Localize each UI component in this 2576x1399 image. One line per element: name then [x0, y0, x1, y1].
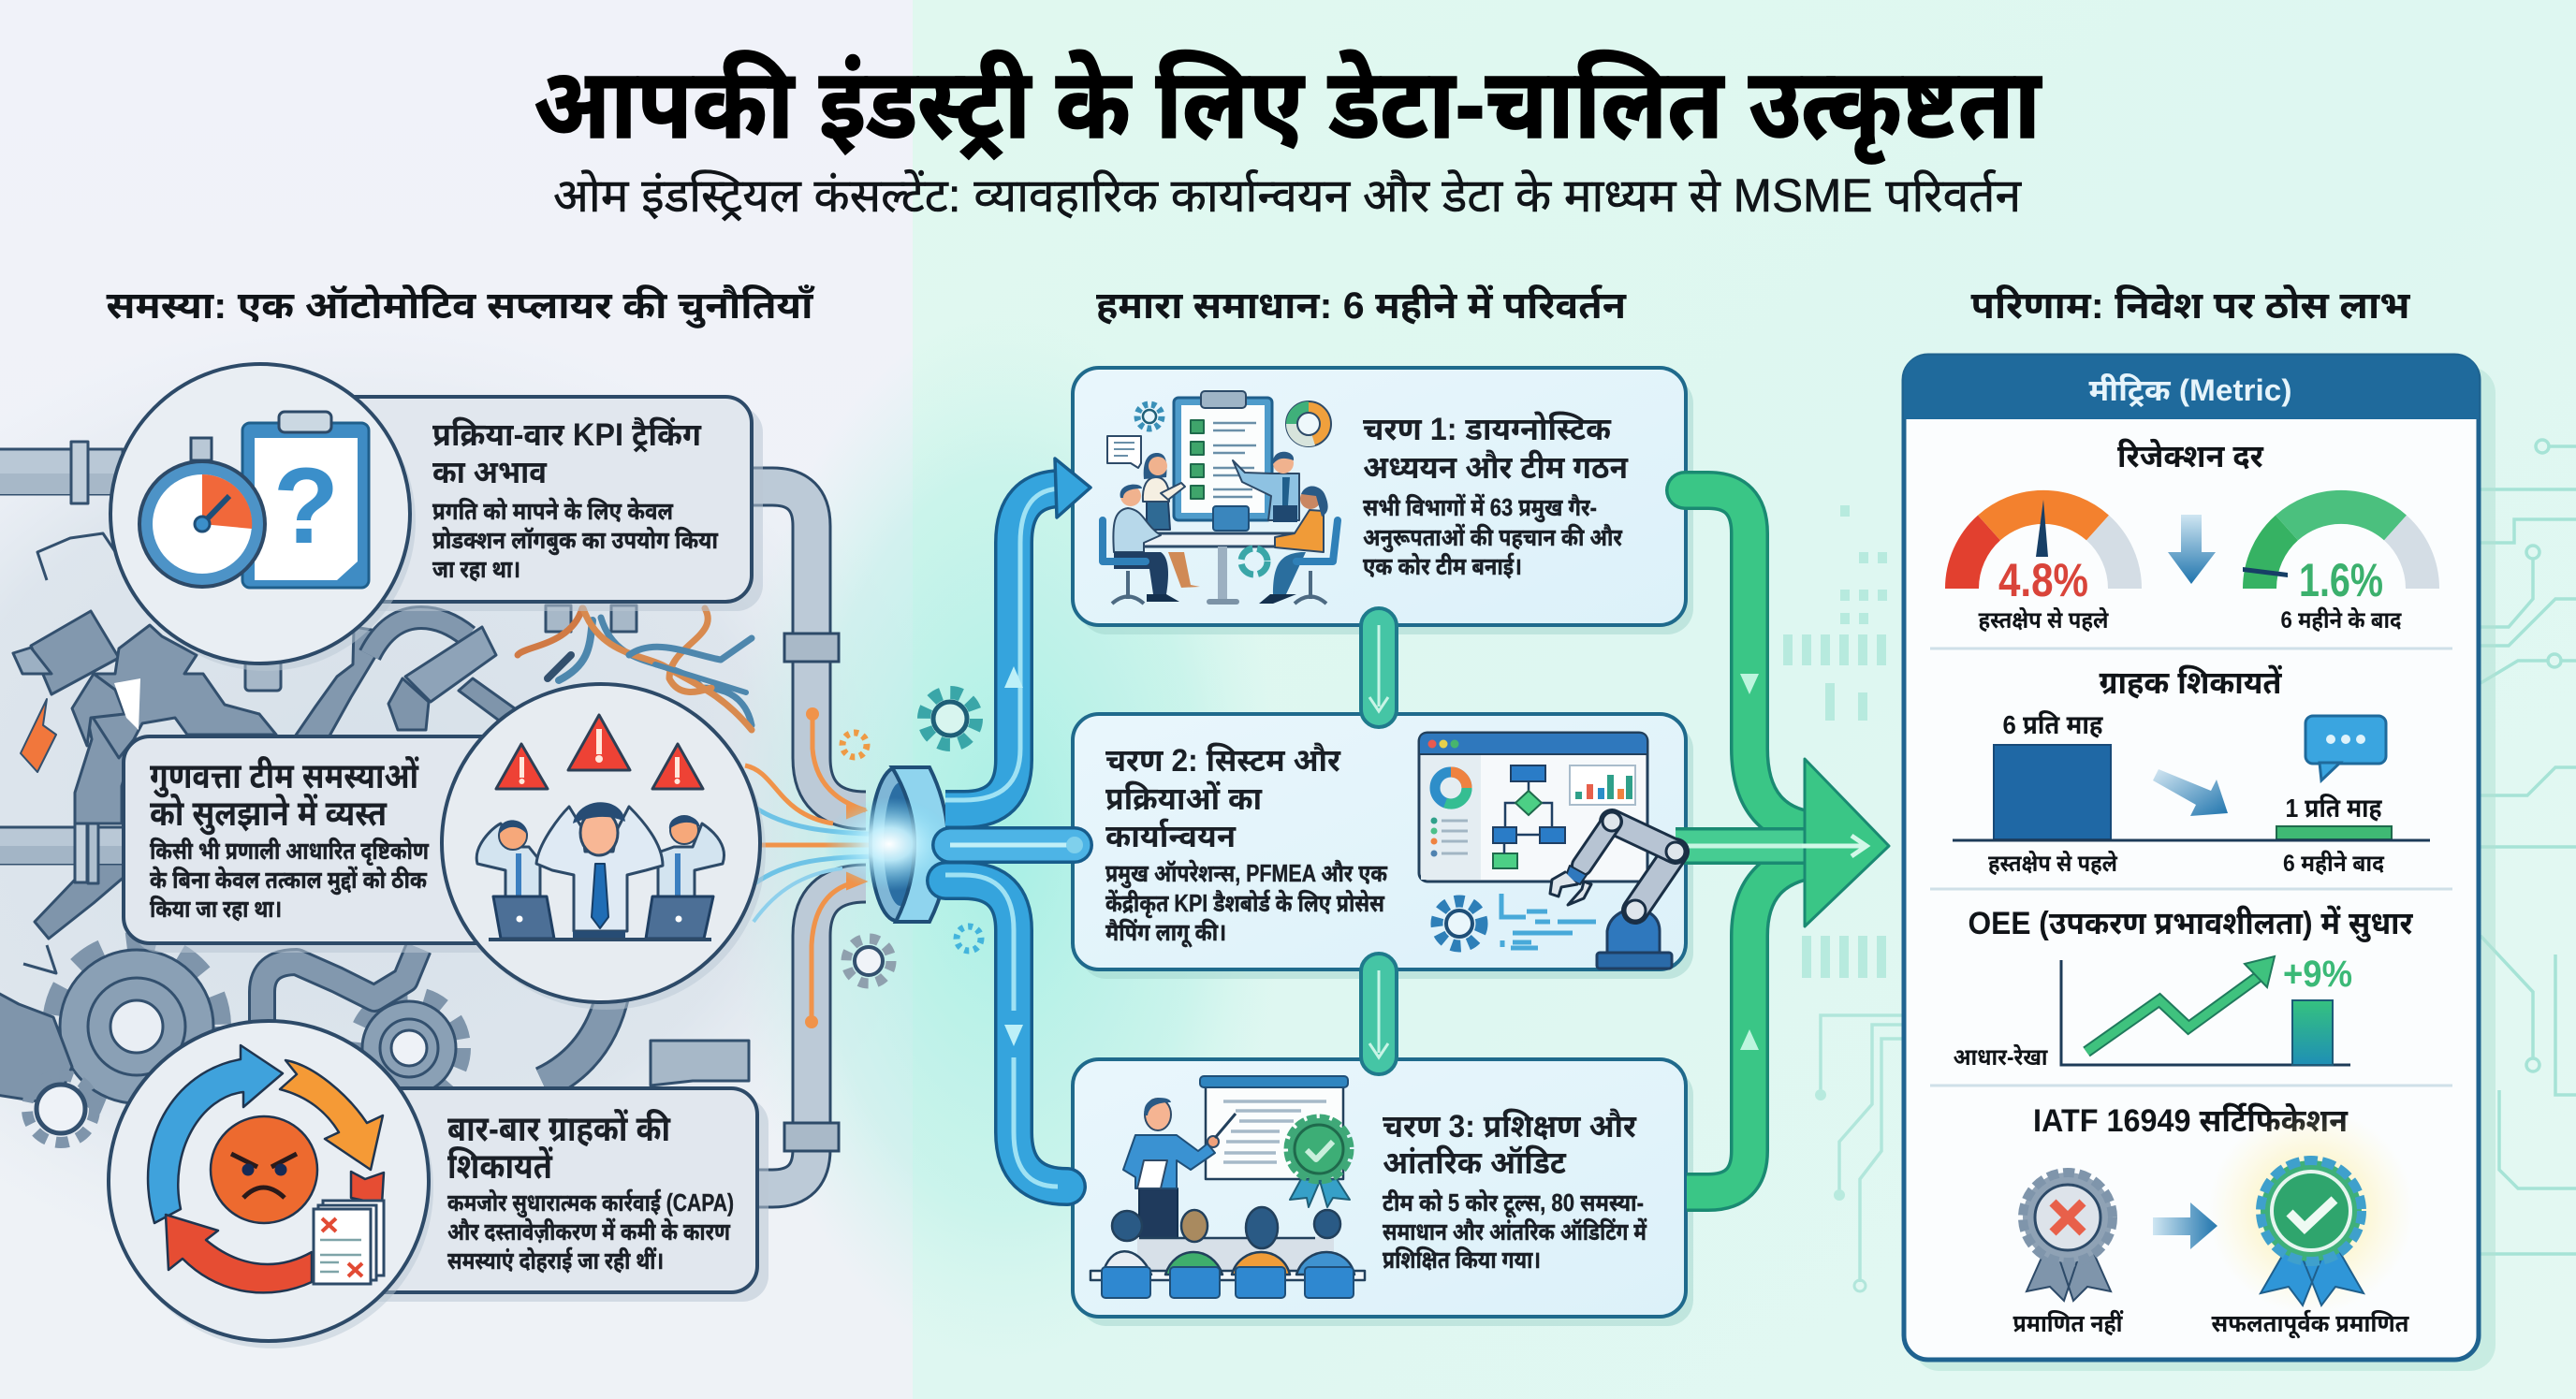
circle: stopwatch and clipboard — [110, 364, 416, 671]
circle: complaint cycle — [109, 1021, 433, 1348]
card 1 body: प्रगति को मापने के लिए केवल — [432, 497, 674, 525]
orange flow on pipes — [812, 716, 866, 1020]
icon: warning triangles — [496, 715, 703, 789]
cracks — [23, 533, 122, 973]
panel: step 2 — [1073, 714, 1693, 979]
arrow down right — [2153, 769, 2228, 816]
icon: clipboard question — [242, 412, 369, 588]
pipe stub top left — [0, 442, 123, 503]
card 3 body: और दस्तावेज़ीकरण में कमी के कारण — [447, 1217, 731, 1246]
heading: solution: हमारा समाधान: 6 महीने में परिवर्तन — [1096, 284, 1627, 327]
subtitle: ओम इंडस्ट्रियल कंसल्टेंट: व्यावहारिक कार्यान्वयन और डेटा के माध्यम से MSME परिवर्तन — [553, 169, 2022, 222]
metrics header: मीट्रिक (Metric) — [2089, 373, 2291, 408]
step 2 illustration: dashboard — [1419, 733, 1647, 948]
card 2 heading: गुणवत्ता टीम समस्याओं — [150, 755, 419, 798]
bar chart: complaints: 1 प्रति माह — [2286, 793, 2383, 823]
card 2 body: किसी भी प्रणाली आधारित दृष्टिकोण — [150, 837, 430, 866]
badge: certified — [2208, 1108, 2414, 1339]
step 1 illustration: team meeting — [1103, 391, 1338, 605]
step 1 body: सभी विभागों में 63 प्रमुख गैर- — [1363, 493, 1597, 522]
panel: step 1 — [1073, 368, 1693, 634]
arrow right — [2153, 1202, 2217, 1249]
bar chart: complaints: हस्तक्षेप से पहले — [1988, 850, 2117, 877]
card 1 heading — [432, 416, 702, 490]
data pixels and circuit left of results panel — [1783, 505, 1904, 1291]
step 3 body: टीम को 5 कोर टूल्स, 80 समस्या- — [1383, 1188, 1644, 1218]
step 3 body — [1383, 1188, 1647, 1274]
arrowhead light line — [1802, 836, 1866, 856]
line chart: OEE — [1953, 954, 2352, 1071]
bent pipe lower — [262, 948, 418, 1025]
bar chart: complaints — [1953, 709, 2430, 877]
line chart: OEE: +9% — [2283, 954, 2352, 995]
step 3 body: समाधान और आंतरिक ऑडिटिंग में — [1383, 1217, 1647, 1246]
pipe system into hub — [739, 487, 889, 1188]
card 3 heading — [447, 1108, 671, 1187]
icon: clipboard question: ? — [273, 446, 339, 566]
card 3 heading: शिकायतें — [447, 1145, 553, 1187]
cycle arrows — [148, 1045, 384, 1292]
card 3 body: कमजोर सुधारात्मक कार्रवाई (CAPA) — [447, 1188, 734, 1217]
angry face — [211, 1116, 317, 1223]
step 1 heading: चरण 1: डायग्नोस्टिक — [1363, 412, 1612, 447]
connector step 2 to 3 — [1361, 954, 1397, 1074]
gauge before — [1962, 500, 2125, 634]
step 1 body — [1363, 493, 1622, 580]
flow lines into hub — [745, 765, 889, 922]
icon: stopwatch — [139, 438, 265, 587]
step 3 illustration: training — [1090, 1076, 1365, 1298]
pipe stub middle left — [0, 810, 127, 939]
people with heads in hands — [476, 802, 724, 940]
rejection rate heading: रिजेक्शन दर — [2117, 438, 2264, 474]
badge: certified: सफलतापूर्वक प्रमाणित — [2211, 1309, 2409, 1339]
small gears around hub — [842, 692, 981, 984]
step 1 heading — [1363, 412, 1629, 486]
step 1 body: एक कोर टीम बनाई। — [1363, 552, 1522, 580]
panel: step 3 — [1073, 1059, 1693, 1326]
panel: problem card 3 — [281, 1088, 768, 1302]
large gear — [52, 942, 221, 1111]
card 1 body — [432, 497, 719, 583]
broken connector — [651, 1041, 749, 1086]
flame — [21, 699, 56, 772]
step 3 body: प्रशिक्षित किया गया। — [1383, 1246, 1541, 1274]
step 3 heading: चरण 3: प्रशिक्षण और — [1383, 1109, 1637, 1144]
circuit decoration right — [2481, 440, 2576, 1254]
broken machinery background — [0, 442, 752, 1143]
badge: not certified — [2012, 1173, 2124, 1337]
gauge before: हस्तक्षेप से पहले — [1979, 606, 2109, 634]
gauge after: 1.6% — [2299, 554, 2383, 606]
step 1 body: अनुरूपताओं की पहचान की और — [1363, 523, 1622, 552]
pipe clamps — [784, 634, 839, 1151]
step 2 heading — [1105, 743, 1341, 854]
step 3 heading — [1383, 1109, 1637, 1181]
green arrowhead — [1805, 759, 1889, 926]
blue arrowhead to step 1 — [1055, 459, 1090, 517]
card 3 body: समस्याएं दोहराई जा रही थीं। — [447, 1246, 664, 1275]
card 1 body: प्रोडक्शन लॉगबुक का उपयोग किया — [432, 526, 719, 555]
bent pipe upper — [370, 618, 468, 655]
card 2 body: के बिना केवल तत्काल मुद्दों को ठीक — [150, 866, 427, 895]
step 2 heading: चरण 2: सिस्टम और — [1105, 743, 1341, 779]
blue solution arrows — [945, 488, 1083, 1187]
panel: metrics — [1904, 356, 2496, 1371]
step 2 body: प्रमुख ऑपरेशन्स, PFMEA और एक — [1105, 859, 1387, 888]
step 1 heading: अध्ययन और टीम गठन — [1363, 450, 1629, 486]
line chart: OEE: आधार-रेखा — [1953, 1043, 2048, 1071]
flow chevrons on green pipes — [1740, 674, 1759, 1050]
gauge after: 6 महीने के बाद — [2280, 606, 2402, 634]
small gear bottom left — [27, 1075, 95, 1143]
rubble far left — [0, 992, 72, 1104]
card 2 body: किया जा रहा था। — [150, 895, 282, 923]
heading: results: परिणाम: निवेश पर ठोस लाभ — [1971, 284, 2410, 327]
green result arrows — [1676, 490, 1863, 1192]
card 2 heading: को सुलझाने में व्यस्त — [150, 793, 388, 836]
card 2 heading — [150, 755, 419, 836]
card 3 heading: बार-बार ग्राहकों की — [447, 1108, 671, 1149]
step 2 heading: प्रक्रियाओं का — [1105, 780, 1263, 817]
vertical broken pipe — [75, 716, 136, 823]
medium gear — [357, 996, 461, 1100]
card 1 heading: का अभाव — [432, 455, 548, 490]
gauge before: 4.8% — [1998, 554, 2088, 606]
panel: problem card 1 — [253, 397, 763, 611]
panel: problem card 2 — [124, 736, 620, 953]
background: grey haze behind broken machinery — [0, 318, 955, 1291]
card 2 body — [150, 837, 430, 923]
robot arm — [1550, 812, 1685, 969]
metrics header — [1904, 356, 2479, 419]
flow chevrons on blue pipes — [1004, 666, 1023, 1046]
tangled wires — [518, 608, 752, 730]
step 2 body: केंद्रीकृत KPI डैशबोर्ड के लिए प्रोसेस — [1105, 889, 1385, 918]
background: problem side — [0, 0, 913, 1399]
card 3 body — [447, 1188, 734, 1275]
connector step 1 to 2 — [1361, 608, 1397, 727]
shattered machine chunks — [13, 611, 376, 758]
step 2 body — [1105, 859, 1387, 948]
card 1 body: जा रहा था। — [432, 555, 520, 583]
step 3 heading: आंतरिक ऑडिट — [1383, 1145, 1567, 1181]
step 2 body: मैपिंग लागू की। — [1105, 918, 1226, 948]
certification heading: IATF 16949 सर्टिफिकेशन — [2033, 1102, 2349, 1139]
heading: problem: समस्या: एक ऑटोमोटिव सप्लायर की चुनौतियाँ — [107, 284, 815, 328]
bar chart: complaints: 6 महीने बाद — [2283, 850, 2385, 877]
background: solution and results side — [913, 0, 2576, 1399]
stubs under card 1 — [245, 605, 637, 691]
title: आपकी इंडस्ट्री के लिए डेटा-चालित उत्कृष्टता — [534, 50, 2042, 164]
documents with errors — [314, 1201, 384, 1284]
background teal glow around the hub — [725, 318, 1287, 1366]
hub coupling — [824, 767, 955, 922]
OEE heading: OEE (उपकरण प्रभावशीलता) में सुधार — [1968, 905, 2413, 943]
arrow down — [2168, 515, 2216, 584]
bar chart: complaints: 6 प्रति माह — [2003, 709, 2104, 739]
badge: not certified: प्रमाणित नहीं — [2012, 1309, 2124, 1337]
step 2 heading: कार्यान्वयन — [1105, 818, 1237, 854]
circle: stressed team — [442, 684, 766, 1010]
icon: speech bubble — [2305, 716, 2386, 780]
card 1 heading: प्रक्रिया-वार KPI ट्रैकिंग — [432, 416, 702, 453]
broken pipe section — [388, 627, 538, 730]
customer complaints heading: ग्राहक शिकायतें — [2099, 664, 2282, 701]
gauge after — [2243, 507, 2422, 634]
